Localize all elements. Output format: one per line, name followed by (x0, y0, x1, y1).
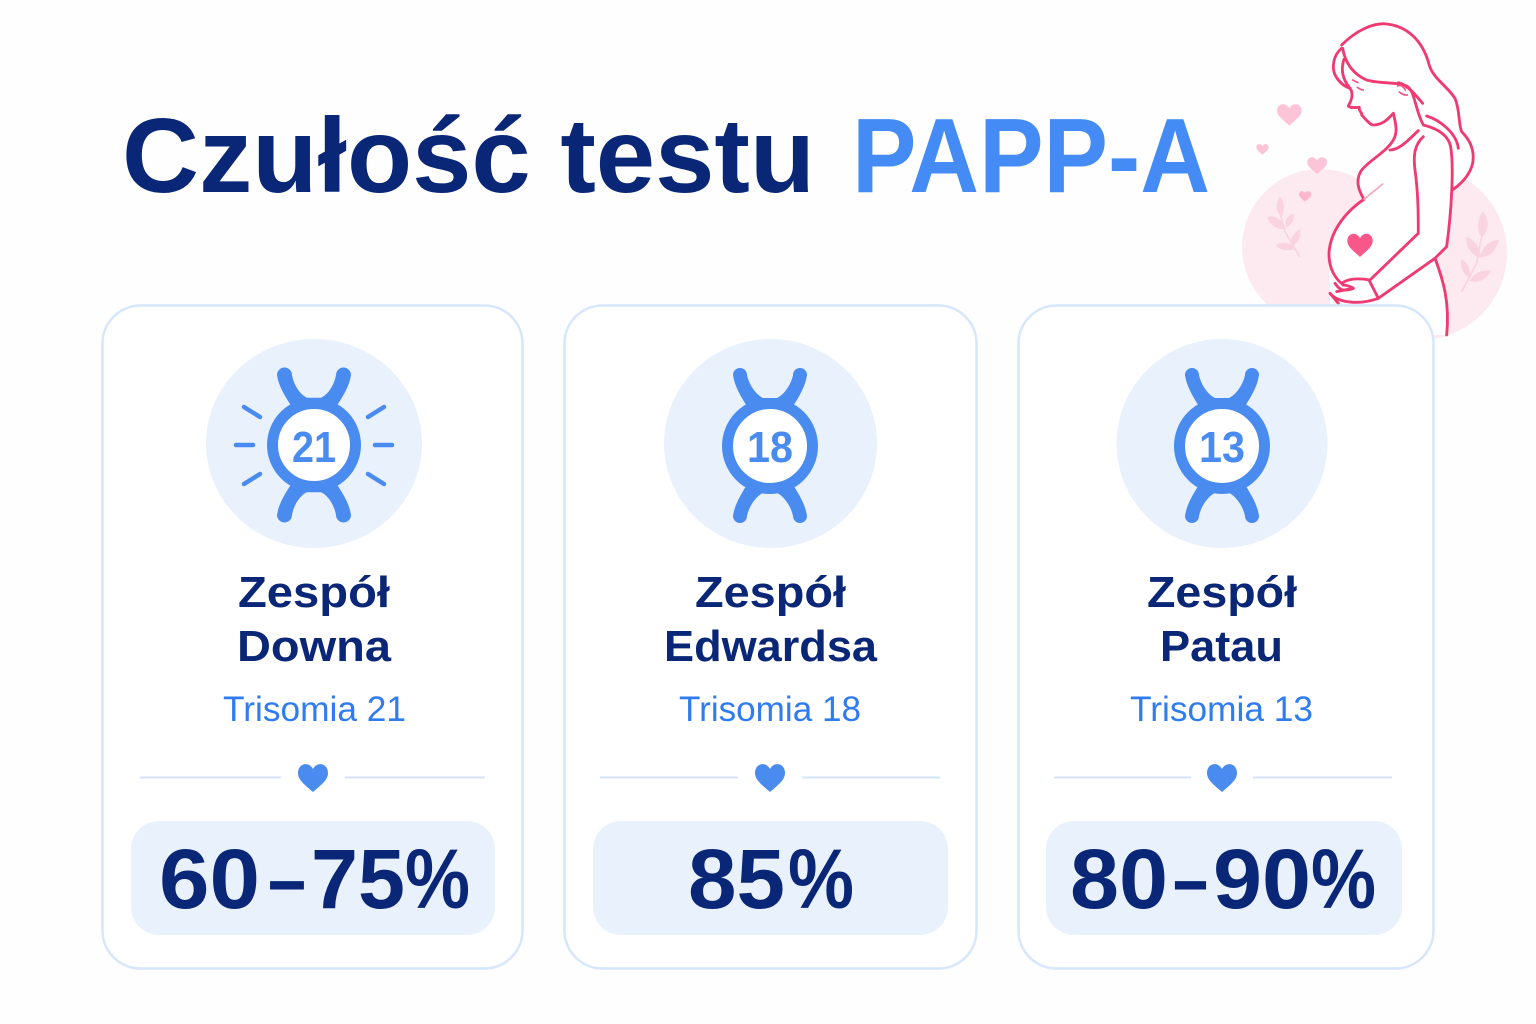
heading: Zespół Edwardsa: Zespół (695, 568, 846, 617)
value pill: 80–90% (1046, 821, 1402, 935)
value pill: 85%: 85 (688, 832, 785, 926)
value pill: 85% (593, 821, 948, 935)
heading: Zespół Downa: Downa (237, 622, 392, 671)
value pill: 80–90%: – (1173, 832, 1208, 926)
icon: heart (298, 764, 328, 792)
icon: heart (755, 764, 785, 792)
subtitle: Trisomia 18: Trisomia 18 (679, 690, 861, 729)
body silhouette (1329, 24, 1473, 335)
subtitle: Trisomia 13: Trisomia 13 (1130, 690, 1313, 729)
value pill: 85%: % (788, 832, 854, 926)
value pill: 80–90%: 80 (1070, 832, 1168, 926)
heading: Zespół Downa: Zespół (238, 568, 390, 617)
heading: Zespół Patau (1147, 568, 1297, 671)
heading: Zespół Patau: Zespół (1147, 568, 1297, 617)
title: PAPP-A (852, 97, 1210, 215)
icon: floating hearts (1256, 104, 1327, 202)
value pill: 80–90%: % (1311, 832, 1376, 926)
icon: chromosome 21: 21 (292, 423, 336, 472)
icon: heart (1207, 764, 1237, 792)
icon: belly heart (1347, 234, 1373, 257)
bust line (1364, 184, 1383, 199)
value pill: 80–90%: 90 (1213, 832, 1311, 926)
value pill: 60–75%: – (268, 832, 306, 926)
heading: Zespół Edwardsa (664, 568, 878, 671)
value pill: 60–75%: 60 (159, 832, 260, 926)
subtitle: Trisomia 21: Trisomia 21 (223, 690, 406, 729)
icon: chromosome 18 (664, 339, 877, 548)
icon: leaf sprigs (1267, 197, 1499, 292)
icon: chromosome 13 (1116, 339, 1328, 548)
panel: Zespół Patau (1018, 306, 1434, 968)
icon: chromosome 18: 18 (747, 423, 793, 472)
panel: Zespół Downa (102, 306, 522, 968)
heading: Zespół Edwardsa: Edwardsa (664, 622, 878, 671)
heading: Zespół Downa (237, 568, 392, 671)
woman outline (1329, 24, 1473, 335)
value pill: 60–75%: % (405, 832, 470, 926)
panel: Zespół Edwardsa (564, 306, 976, 968)
heading: Zespół Patau: Patau (1160, 622, 1283, 671)
title (122, 97, 1210, 215)
illustration: pregnant woman with hearts (1242, 24, 1507, 340)
icon: chromosome 13: 13 (1199, 423, 1245, 472)
title: Czułość testu (122, 97, 815, 215)
icon: chromosome 21 (206, 339, 422, 548)
value pill: 60–75% (131, 821, 495, 935)
value pill: 60–75%: 75 (311, 832, 405, 926)
